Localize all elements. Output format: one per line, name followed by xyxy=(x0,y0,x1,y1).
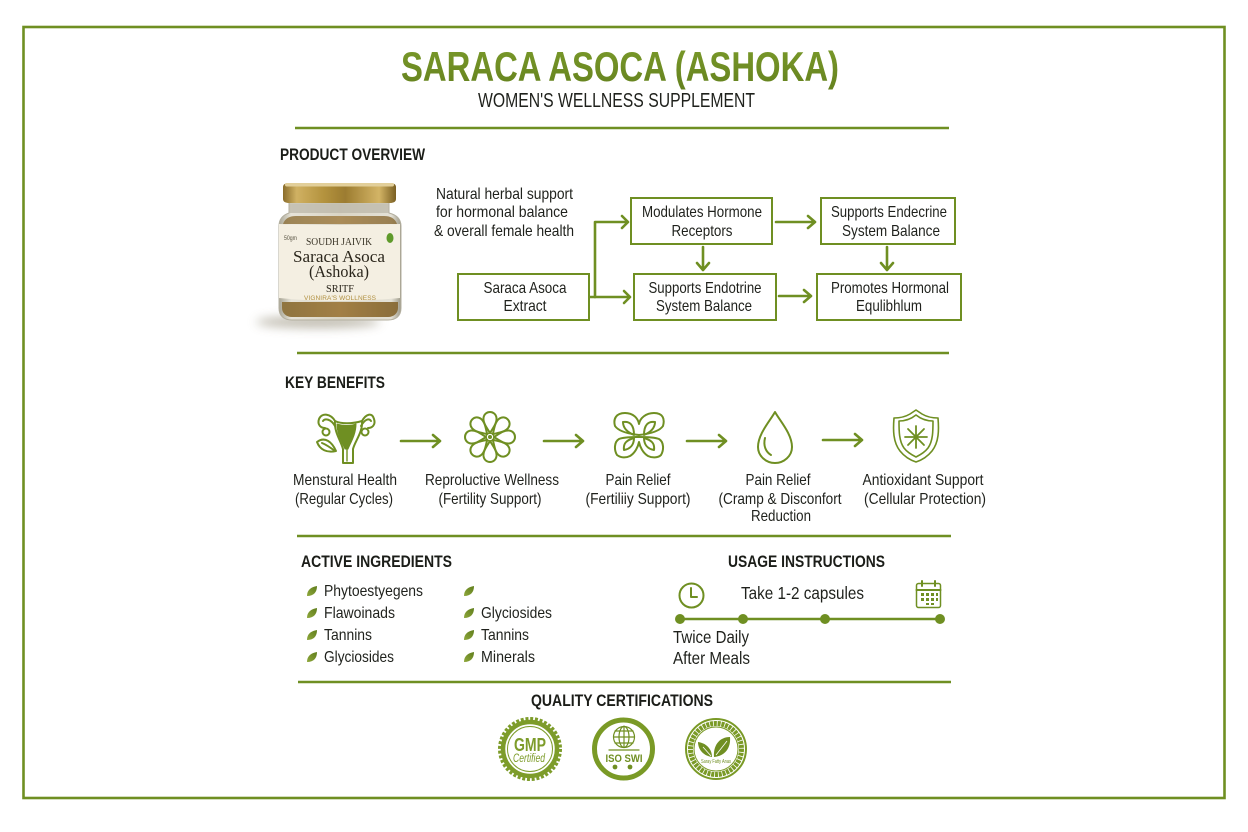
flow box: promotes: Equlibhlum xyxy=(856,298,922,315)
benefit label: antioxidant xyxy=(862,472,986,508)
badge: GMP: GMP xyxy=(514,735,546,755)
benefit label: pain relief xyxy=(586,472,690,508)
arrow xyxy=(401,435,440,447)
jar label text xyxy=(284,233,394,302)
benefit label: cramp: (Cramp & Disconfort xyxy=(718,491,842,508)
icon: drop xyxy=(758,412,792,463)
flow box: modulates: Receptors xyxy=(672,223,732,240)
flow box: endotrine xyxy=(634,274,776,320)
badge: eco leaf: Saray Fatty Anas xyxy=(701,759,731,765)
benefit label: pain relief: Pain Relief xyxy=(606,472,671,489)
flow box: endotrine: System Balance xyxy=(656,298,752,315)
flow box: modulates xyxy=(631,198,772,244)
flow box: extract: Saraca Asoca xyxy=(484,280,567,297)
timeline xyxy=(675,614,945,624)
icon: calendar xyxy=(916,581,940,608)
heading: product overview: PRODUCT OVERVIEW xyxy=(280,145,426,164)
icon: shield xyxy=(894,410,938,462)
flow arrows xyxy=(590,216,893,303)
timing text xyxy=(673,627,750,668)
timing text: After Meals xyxy=(673,648,750,668)
benefit label: pain relief: (Fertiliiy Support) xyxy=(586,491,690,508)
heading: usage instructions: USAGE INSTRUCTIONS xyxy=(728,552,885,571)
badge: GMP: Certified xyxy=(513,753,545,765)
benefit label: reproductive: Reproluctive Wellness xyxy=(425,472,559,489)
flow box: endecrine: Supports Endecrine xyxy=(831,204,947,221)
icon: uterus xyxy=(317,415,375,463)
timing text: Twice Daily xyxy=(673,627,749,647)
ingredient list right: Glyciosides xyxy=(481,605,552,622)
panel: product overview xyxy=(256,145,961,328)
badge: ISO xyxy=(594,720,652,778)
icon: four leaf petals xyxy=(614,413,664,457)
heading: key benefits: KEY BENEFITS xyxy=(285,373,385,392)
ingredient list right: Tannins xyxy=(481,627,529,644)
badge: GMP xyxy=(500,718,560,780)
flow box: endotrine: Supports Endotrine xyxy=(648,280,762,297)
product jar xyxy=(256,183,401,328)
subtitle: WOMEN'S WELLNESS SUPPLEMENT xyxy=(478,90,755,112)
title: SARACA ASOCA (ASHOKA) xyxy=(401,43,839,90)
intro text: Natural herbal support xyxy=(436,186,573,203)
arrow xyxy=(823,434,862,446)
benefit label: cramp: Pain Relief xyxy=(746,472,811,489)
intro text: & overall female health xyxy=(434,223,574,240)
dose text: Take 1-2 capsules xyxy=(741,583,864,603)
flow box: modulates: Modulates Hormone xyxy=(642,204,762,221)
benefit label: reproductive: (Fertility Support) xyxy=(438,491,542,508)
arrow xyxy=(687,435,726,447)
flow box: promotes xyxy=(817,274,961,320)
title xyxy=(401,43,839,112)
flow box: extract xyxy=(458,274,589,320)
jar label text: (Ashoka) xyxy=(309,262,369,281)
ingredient list right xyxy=(464,586,552,666)
benefit label: menstrual: Menstural Health xyxy=(293,472,397,489)
flow box: endecrine xyxy=(821,198,955,244)
panel: usage instructions xyxy=(673,552,945,668)
ingredient list left: Glyciosides xyxy=(324,649,394,666)
jar label text: SOUDH JAIVIK xyxy=(306,237,373,248)
benefit label: antioxidant: Antioxidant Support xyxy=(862,472,984,489)
flow box: endecrine: System Balance xyxy=(842,223,940,240)
panel: quality certifications xyxy=(500,691,746,780)
ingredient list right: Minerals xyxy=(481,649,535,666)
benefit label: menstrual: (Regular Cycles) xyxy=(295,491,393,508)
ingredient list left: Phytoestyegens xyxy=(324,583,423,600)
arrow xyxy=(544,435,583,447)
benefit label: cramp xyxy=(718,472,842,525)
heading: active ingredients: ACTIVE INGREDIENTS xyxy=(301,552,452,571)
ingredient list left xyxy=(307,583,423,666)
benefit label: reproductive xyxy=(425,472,559,508)
benefit label: antioxidant: (Cellular Protection) xyxy=(864,491,986,508)
panel: active ingredients xyxy=(301,552,552,666)
flow box: extract: Extract xyxy=(504,298,547,315)
heading: quality certifications: QUALITY CERTIFICATIONS xyxy=(531,691,713,710)
jar label text: Saraca Asoca xyxy=(293,247,385,266)
benefit label: menstrual xyxy=(293,472,397,508)
intro text xyxy=(434,186,574,240)
intro text: for hormonal balance xyxy=(436,204,568,221)
icon: clock xyxy=(680,584,704,608)
jar label text: 50gm xyxy=(284,236,297,242)
flow box: promotes: Promotes Hormonal xyxy=(831,280,949,297)
jar label text: SRITF xyxy=(326,283,354,295)
icon: flower xyxy=(465,412,515,462)
ingredient list left: Flawoinads xyxy=(324,605,395,622)
badge: eco leaf xyxy=(686,719,746,779)
benefit label: cramp: Reduction xyxy=(751,508,811,525)
panel: key benefits xyxy=(285,373,986,525)
ingredient list left: Tannins xyxy=(324,627,372,644)
jar label text: VIGNIRA'S WOLLNESS xyxy=(304,295,377,302)
badge: ISO: ISO SWI xyxy=(606,753,642,765)
